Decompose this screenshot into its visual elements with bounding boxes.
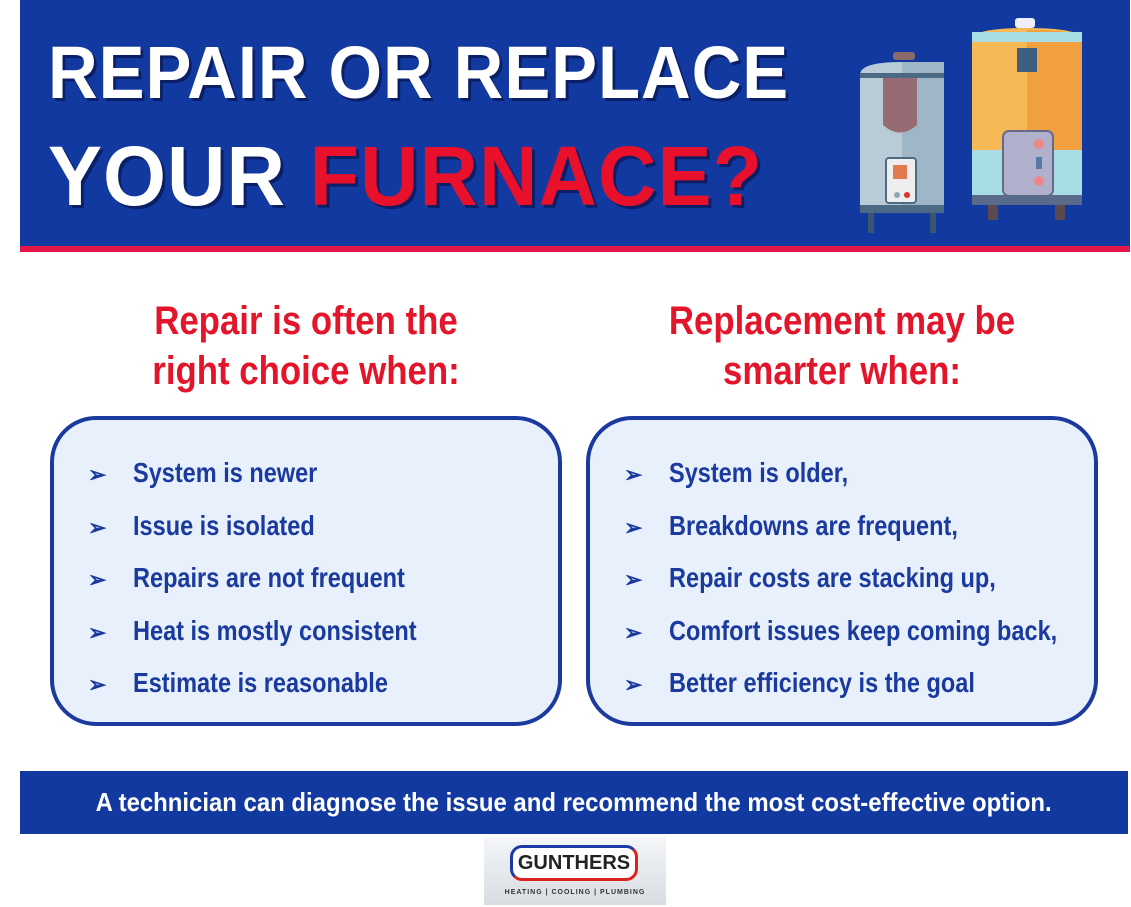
icon: water heaters bbox=[860, 18, 1082, 233]
panel: repair list: System is newer bbox=[133, 457, 317, 488]
panel: repair list: ➢ bbox=[88, 672, 106, 697]
heading: repair bbox=[152, 299, 460, 393]
footer banner: A technician can diagnose the issue and recommend the most cost-effective option. bbox=[96, 787, 1052, 817]
title: YOUR FURNACE? bbox=[48, 129, 763, 223]
title bbox=[48, 31, 789, 223]
panel: replacement list: Better efficiency is the goal bbox=[669, 667, 975, 698]
panel: replacement list: ➢ bbox=[624, 672, 642, 697]
panel: repair list: Issue is isolated bbox=[133, 510, 315, 541]
heading: replacement: Replacement may be bbox=[669, 299, 1015, 343]
logo: GUNTHERS bbox=[518, 852, 630, 874]
panel: repair list: Repairs are not frequent bbox=[133, 562, 405, 593]
panel: repair list: Estimate is reasonable bbox=[133, 667, 388, 698]
heading: replacement: smarter when: bbox=[723, 349, 961, 393]
panel: repair list bbox=[50, 416, 562, 726]
title: REPAIR OR REPLACE bbox=[48, 31, 789, 114]
panel: replacement list: Repair costs are stacking up, bbox=[669, 562, 996, 593]
panel: replacement list: ➢ bbox=[624, 462, 642, 487]
heading: replacement bbox=[669, 299, 1015, 393]
panel: replacement list: Breakdowns are frequent, bbox=[669, 510, 958, 541]
panel: replacement list: ➢ bbox=[624, 620, 642, 645]
header banner bbox=[20, 0, 1130, 252]
logo: HEATING | COOLING | PLUMBING bbox=[505, 889, 645, 896]
panel: replacement list: Comfort issues keep coming back, bbox=[669, 615, 1057, 646]
footer banner bbox=[20, 771, 1128, 834]
logo bbox=[484, 837, 666, 905]
panel: replacement list: ➢ bbox=[624, 567, 642, 592]
panel: repair list: ➢ bbox=[88, 620, 106, 645]
panel: repair list: Heat is mostly consistent bbox=[133, 615, 417, 646]
panel: repair list: ➢ bbox=[88, 567, 106, 592]
panel: repair list: ➢ bbox=[88, 462, 106, 487]
panel: replacement list bbox=[586, 416, 1098, 726]
panel: replacement list: System is older, bbox=[669, 457, 848, 488]
panel: replacement list: ➢ bbox=[624, 515, 642, 540]
panel: repair list: ➢ bbox=[88, 515, 106, 540]
heading: repair: right choice when: bbox=[152, 349, 460, 393]
heading: repair: Repair is often the bbox=[154, 299, 458, 343]
